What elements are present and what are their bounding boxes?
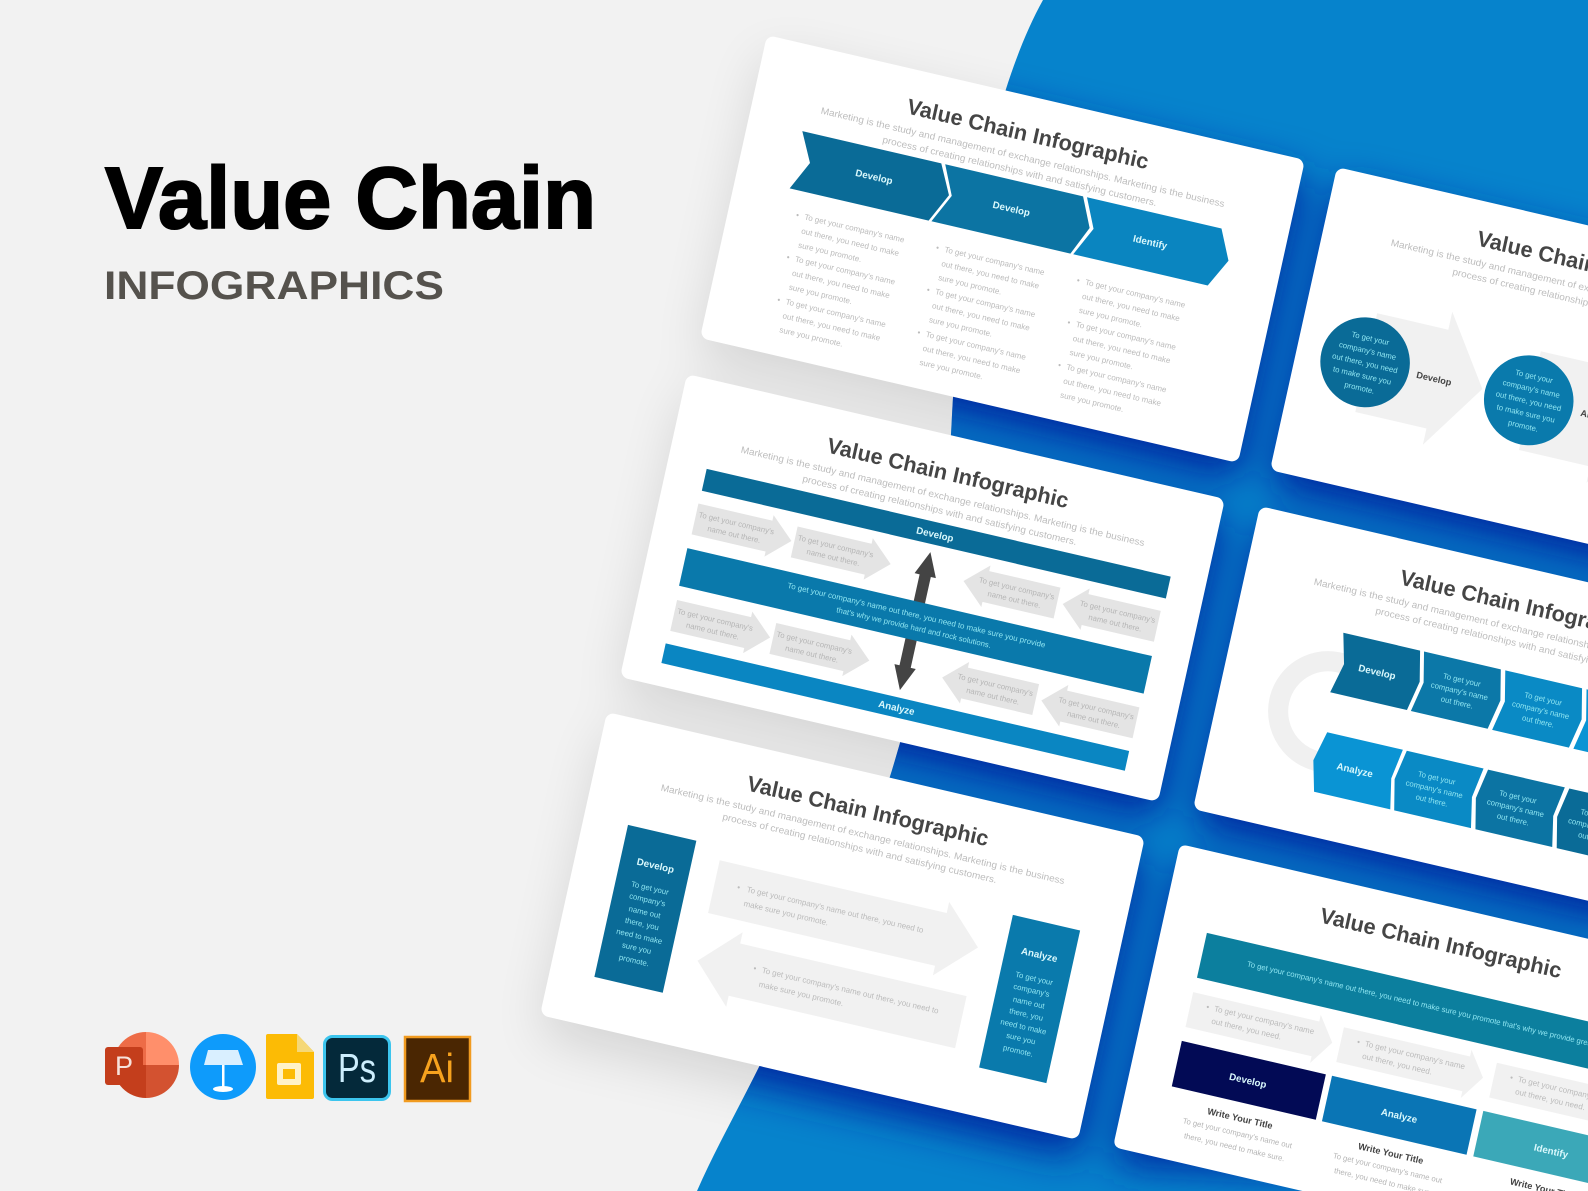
panel: slide 4 circles: out there, you need <box>1495 389 1562 413</box>
panel: slide 2 bars and arrows: name out there. <box>707 524 761 545</box>
panel: slide 3 two-way arrows: • <box>753 964 757 973</box>
panel: slide 3 two-way arrows: Analyze <box>1020 946 1059 965</box>
panel: slide 2 bars and arrows: To get your company's <box>957 672 1034 698</box>
panel: slide 6 three blocks: • <box>1205 1002 1210 1012</box>
panel: slide 1 chevrons: sure you promote. <box>788 283 853 306</box>
panel: slide 5 cycle rows: company's name <box>1430 680 1489 702</box>
panel: slide 6 three blocks: out there, you need. <box>1211 1017 1282 1042</box>
panel: slide 6 three blocks: Value Chain Infographic <box>1318 903 1564 983</box>
panel: slide 1 chevrons: • <box>795 211 800 220</box>
panel: slide 6 three blocks: • <box>1509 1073 1514 1082</box>
panel: slide 2 bars and arrows: Value Chain Infographic <box>825 433 1071 513</box>
panel: slide 2 bars and arrows: To get your company's <box>978 575 1055 602</box>
panel: slide 6 three blocks: there, you need to make sure. <box>1183 1131 1285 1163</box>
panel: slide 2 bars and arrows: To get your company's <box>698 510 775 537</box>
panel: slide 3 two-way arrows: Value Chain Infographic <box>745 771 991 851</box>
panel: slide 2 bars and arrows: name out there. <box>1088 613 1142 634</box>
panel: slide 3 two-way arrows: promote. <box>1002 1043 1034 1059</box>
panel: slide 1 chevrons: sure you promote. <box>797 241 862 264</box>
panel: slide 5 cycle rows: company's name <box>1486 797 1545 819</box>
icon: Photoshop: Ps <box>338 1045 376 1091</box>
panel: slide 4 circles: promote. <box>1344 380 1375 396</box>
panel: slide 1 chevrons: To get your company's name <box>1066 363 1168 395</box>
panel: slide 3 two-way arrows: need to make <box>615 927 663 946</box>
panel: slide 2 bars and arrows: To get your company's <box>1058 695 1135 722</box>
panel: slide 3 two-way arrows <box>540 712 1145 1140</box>
panel: slide 5 cycle rows: To get your <box>1523 690 1563 708</box>
panel: slide 6 three blocks: Develop <box>1228 1072 1267 1091</box>
panel: slide 3 two-way arrows: company's <box>628 891 666 909</box>
panel: slide 1 chevrons: To get your company's name <box>785 297 887 329</box>
panel: slide 1 chevrons: • <box>917 328 921 337</box>
panel: slide 1 chevrons: To get your company's name <box>794 255 897 287</box>
panel: slide 1 chevrons: To get your company's name <box>934 287 1037 319</box>
panel: slide 1 chevrons <box>700 35 1305 463</box>
panel: slide 1 chevrons: • <box>1067 318 1071 327</box>
panel: slide 2 bars and arrows: name out there. <box>806 547 861 568</box>
panel: slide 5 cycle rows: out there. <box>1415 792 1449 809</box>
panel: slide 6 three blocks: • <box>1356 1037 1361 1047</box>
panel: slide 6 three blocks: out there, you need. <box>1361 1052 1433 1077</box>
background blue curved shape <box>697 0 1588 1191</box>
panel: slide 1 chevrons: out there, you need to make <box>1081 292 1181 323</box>
panel: slide 1 chevrons: To get your company's name <box>944 245 1046 277</box>
panel: slide 3 two-way arrows: process of creating relationships with and satisfying customers. <box>721 812 998 886</box>
panel: slide 2 bars and arrows <box>620 374 1225 802</box>
panel: slide 6 three blocks: To get your company's name <box>1364 1039 1466 1071</box>
panel: slide 1 chevrons: • <box>935 243 940 253</box>
panel: slide 4 circles: To get your <box>1514 368 1554 385</box>
panel: slide 1 chevrons: To get your company's name <box>925 330 1027 362</box>
panel: slide 3 two-way arrows: • <box>736 883 741 892</box>
panel: slide 1 chevrons: sure you promote. <box>1059 391 1124 414</box>
panel: slide 5 cycle rows: out there. <box>1521 713 1555 730</box>
panel: slide 2 bars and arrows: Analyze <box>877 699 916 718</box>
panel: slide 3 two-way arrows: Marketing is the study and management of exchange relationships. Marketing is the business <box>660 783 1066 887</box>
panel: slide 6 three blocks: To get your company's name out there, you need to make sure you promote that's why we provide great <box>1246 959 1588 1049</box>
panel: slide 3 two-way arrows: company's <box>1013 982 1051 999</box>
panel: slide 6 three blocks <box>1113 844 1588 1191</box>
panel: slide 3 two-way arrows: promote. <box>618 953 650 968</box>
panel: slide 2 bars and arrows: name out there. <box>784 644 839 665</box>
panel: slide 2 bars and arrows: To get your company's <box>676 607 754 633</box>
icon: PowerPoint <box>105 1032 179 1098</box>
panel: slide 3 two-way arrows: sure you <box>621 940 652 956</box>
panel: slide 3 two-way arrows: need to make <box>1000 1017 1047 1037</box>
panel: slide 6 three blocks: Write Your Title <box>1206 1106 1274 1131</box>
panel: slide 3 two-way arrows: make sure you promote. <box>758 980 844 1008</box>
panel: slide 1 chevrons: Identify <box>1132 234 1169 252</box>
panel: slide 1 chevrons: • <box>1076 276 1081 285</box>
subtitle: INFOGRAPHICS <box>104 264 444 308</box>
panel: slide 3 two-way arrows: make sure you promote. <box>743 899 829 927</box>
panel: slide 2 bars and arrows: To get your company's name out there, you need to make sure you provide <box>787 581 1046 650</box>
icon: Photoshop <box>324 1036 390 1100</box>
icon: Keynote <box>190 1034 256 1100</box>
panel: slide 3 two-way arrows: To get your <box>1014 970 1054 987</box>
panel: slide 3 two-way arrows: To get your company's name out there, you need to <box>761 966 940 1016</box>
panel: slide 5 cycle rows: Analyze <box>1335 761 1374 781</box>
panel: slide 2 bars and arrows: To get your company's <box>776 630 853 656</box>
panel: slide 5 cycle rows <box>1193 506 1588 934</box>
panel: slide 5 cycle rows: company's name <box>1405 778 1464 800</box>
panel: slide 1 chevrons: Value Chain Infographic <box>905 94 1151 174</box>
panel: slide 1 chevrons: To get your company's name <box>804 213 906 245</box>
panel: slide 4 circles: to make sure you <box>1332 364 1392 387</box>
panel: slide 5 cycle rows: To get your <box>1417 769 1457 787</box>
panel: slide 6 three blocks: Analyze <box>1380 1107 1419 1126</box>
icon: Illustrator <box>405 1037 470 1101</box>
panel: slide 1 chevrons: To get your company's name <box>1075 320 1177 352</box>
panel: slide 2 bars and arrows: Develop <box>915 526 954 545</box>
panel: slide 2 bars and arrows: To get your company's <box>1079 599 1156 625</box>
panel: slide 3 two-way arrows: To get your company's name out there, you need to <box>746 885 925 935</box>
icon: Illustrator: Ai <box>420 1045 454 1091</box>
panel: slide 5 cycle rows: out there. <box>1440 694 1474 711</box>
panel: slide 1 chevrons: sure you promote. <box>1078 306 1143 329</box>
panel: slide 1 chevrons: Develop <box>992 200 1031 219</box>
panel: slide 6 three blocks: To get your company's name out <box>1182 1116 1294 1150</box>
panel: slide 1 chevrons: out there, you need to make <box>791 269 891 300</box>
panel: slide 6 three blocks: To get your company's name <box>1213 1004 1316 1036</box>
panel: slide 1 chevrons: sure you promote. <box>937 273 1002 297</box>
panel: slide 4 circles: company's name <box>1502 378 1561 400</box>
panel: slide 1 chevrons: To get your company's name <box>1084 278 1187 310</box>
panel: slide 1 chevrons: sure you promote. <box>779 325 844 349</box>
panel: slide 3 two-way arrows: name out <box>628 904 662 920</box>
panel: slide 2 bars and arrows: name out there. <box>965 686 1020 707</box>
panel: slide 1 chevrons: out there, you need to make <box>782 311 882 343</box>
panel: slide 3 two-way arrows: there, you <box>1008 1006 1044 1023</box>
panel: slide 1 chevrons: • <box>776 295 781 305</box>
panel: slide 1 chevrons: process of creating relationships with and satisfying customers. <box>881 135 1158 209</box>
panel: slide 4 circles: to make sure you <box>1496 402 1556 425</box>
panel: slide 4 circles: promote. <box>1507 418 1539 434</box>
panel: slide 3 two-way arrows: Develop <box>636 857 675 876</box>
icon: PowerPoint: P <box>115 1051 133 1081</box>
panel: slide 1 chevrons: out there, you need to make <box>941 259 1040 291</box>
panel: slide 2 bars and arrows: Marketing is the study and management of exchange relationships. Marketing is the business <box>740 445 1146 549</box>
icon: Google Slides <box>266 1034 314 1099</box>
panel: slide 3 two-way arrows: To get your <box>630 879 670 897</box>
panel: slide 1 chevrons: sure you promote. <box>1069 348 1134 371</box>
panel: slide 6 three blocks: out there, you need. <box>1514 1087 1586 1112</box>
panel: slide 4 circles: Develop <box>1415 370 1453 388</box>
panel: slide 1 chevrons: • <box>926 285 931 295</box>
panel: slide 6 three blocks: Write Your Title <box>1357 1141 1424 1166</box>
panel: slide 2 bars and arrows: name out there. <box>987 589 1042 610</box>
panel: slide 1 chevrons: Marketing is the study and management of exchange relationships. Marketing is the business <box>820 106 1226 210</box>
panel: slide 1 chevrons: out there, you need to make <box>922 344 1022 375</box>
panel: slide 4 circles: To get your <box>1351 330 1390 347</box>
panel: slide 1 chevrons: • <box>786 253 791 262</box>
panel: slide 4 circles: out there, you need <box>1331 351 1398 375</box>
panel: slide 1 chevrons: out there, you need to make <box>931 301 1031 333</box>
panel: slide 5 cycle rows: Develop <box>1357 663 1397 682</box>
panel: slide 2 bars and arrows: name out there. <box>1066 709 1121 730</box>
panel: slide 2 bars and arrows: process of creating relationships with and satisfying customers. <box>801 474 1078 548</box>
panel: slide 2 bars and arrows: that's why we provide hard and rock solutions. <box>836 605 992 650</box>
panel: slide 5 cycle rows: company's name <box>1511 699 1570 721</box>
panel: slide 5 cycle rows: To get your <box>1442 671 1482 689</box>
panel: slide 3 two-way arrows: sure you <box>1005 1031 1036 1046</box>
panel: slide 2 bars and arrows: name out there. <box>685 621 740 642</box>
panel: slide 4 circles: company's name <box>1338 340 1397 362</box>
panel: slide 4 circles <box>1270 167 1588 595</box>
main title: Value Chain <box>105 150 596 247</box>
panel: slide 2 bars and arrows: To get your company's <box>797 533 874 560</box>
panel: slide 1 chevrons: out there, you need to make <box>1062 377 1162 408</box>
panel: slide 6 three blocks: Identify <box>1533 1142 1570 1161</box>
panel: slide 5 cycle rows: To get your <box>1498 788 1538 806</box>
panel: slide 1 chevrons: sure you promote. <box>919 358 984 381</box>
panel: slide 3 two-way arrows: name out <box>1012 995 1046 1011</box>
panel: slide 1 chevrons: • <box>1057 361 1062 370</box>
panel: slide 1 chevrons: sure you promote. <box>928 315 993 339</box>
panel: slide 3 two-way arrows: there, you <box>624 916 660 932</box>
panel: slide 1 chevrons: out there, you need to make <box>1072 334 1172 365</box>
panel: slide 1 chevrons: Develop <box>854 168 894 187</box>
panel: slide 5 cycle rows: out there. <box>1496 811 1530 828</box>
panel: slide 1 chevrons: out there, you need to make <box>800 227 900 258</box>
panel: slide 6 three blocks: To get your company's name out <box>1332 1151 1444 1185</box>
